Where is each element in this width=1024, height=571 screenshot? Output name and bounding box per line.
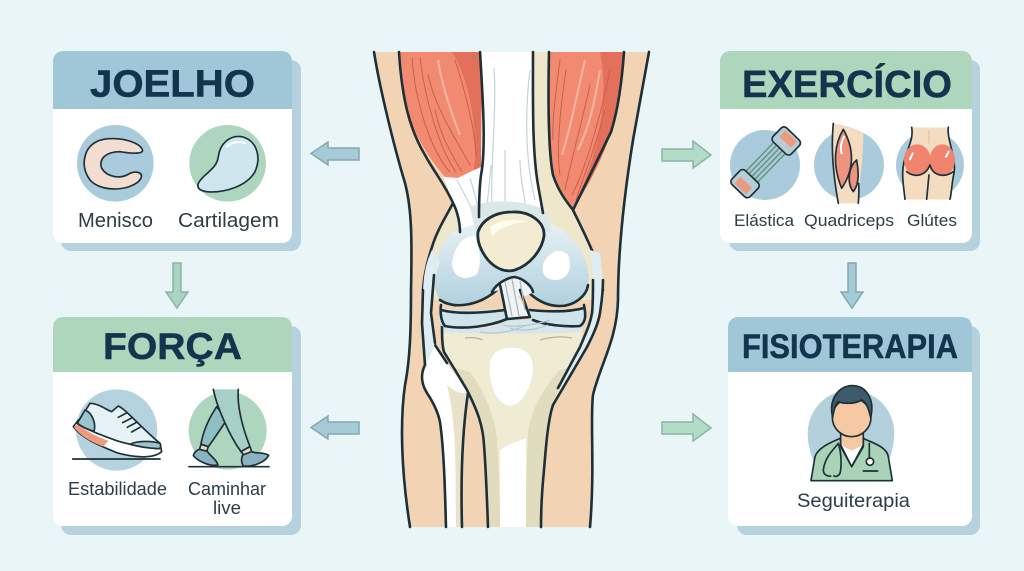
arrow: centre to fisioterapia <box>662 414 711 441</box>
icon: fisioterapeuta <box>808 386 894 481</box>
icon: menisco <box>77 125 154 202</box>
heading bar: joelho <box>53 51 292 109</box>
cruciate ligament <box>492 277 533 319</box>
arrow: exercício to fisioterapia <box>841 263 863 308</box>
label: cartilagem: Cartilagem <box>178 210 279 232</box>
label: menisco: Menisco <box>78 210 153 232</box>
heading: exercício: EXERCÍCIO <box>742 62 952 106</box>
femur cream <box>423 52 604 300</box>
patella <box>478 212 544 271</box>
icon: tênis <box>73 389 162 471</box>
muscle: left quadriceps <box>400 52 482 178</box>
heading bar: fisioterapia <box>728 317 972 372</box>
icon: glúteos <box>896 127 964 199</box>
heading: força: FORÇA <box>103 326 242 367</box>
fibula <box>422 325 553 527</box>
heading: fisioterapia: FISIOTERAPIA <box>742 328 958 366</box>
label: glútes: Glútes <box>907 211 957 230</box>
arrow: centre to força <box>311 416 359 439</box>
heading bar: força <box>53 317 292 372</box>
tibia <box>442 320 584 527</box>
icon: caminhar <box>189 389 269 470</box>
outer leg outlines <box>374 52 649 527</box>
panel: força <box>53 317 301 535</box>
muscle: right quadriceps <box>549 52 623 210</box>
skin <box>374 52 649 527</box>
icon: faixa elástica <box>729 125 802 200</box>
meniscus <box>439 305 586 333</box>
arrow: centre to joelho <box>311 142 359 165</box>
label: caminhar live: Caminhar <box>188 479 266 499</box>
heading bar: exercício <box>720 51 972 109</box>
icon: cartilagem <box>189 125 266 202</box>
label: elástica: Elástica <box>734 211 795 230</box>
medial and lateral ligaments <box>422 250 603 405</box>
label: seguiterapia: Seguiterapia <box>797 490 910 512</box>
arrow: joelho to força <box>166 263 188 308</box>
quadriceps tendon <box>443 52 545 245</box>
arrow: centre to exercício <box>662 141 711 168</box>
label: caminhar live: live <box>213 498 241 518</box>
knee anatomy illustration <box>374 52 649 527</box>
condyles <box>434 201 589 306</box>
icon: quadríceps <box>814 123 884 203</box>
panel: exercício <box>720 51 980 251</box>
label: quadriceps: Quadriceps <box>804 211 894 230</box>
femur outlines <box>399 52 624 290</box>
panel: fisioterapia <box>728 317 980 535</box>
label: estabilidade: Estabilidade <box>68 479 167 499</box>
panel: joelho <box>53 51 301 251</box>
heading: joelho: JOELHO <box>90 64 255 106</box>
